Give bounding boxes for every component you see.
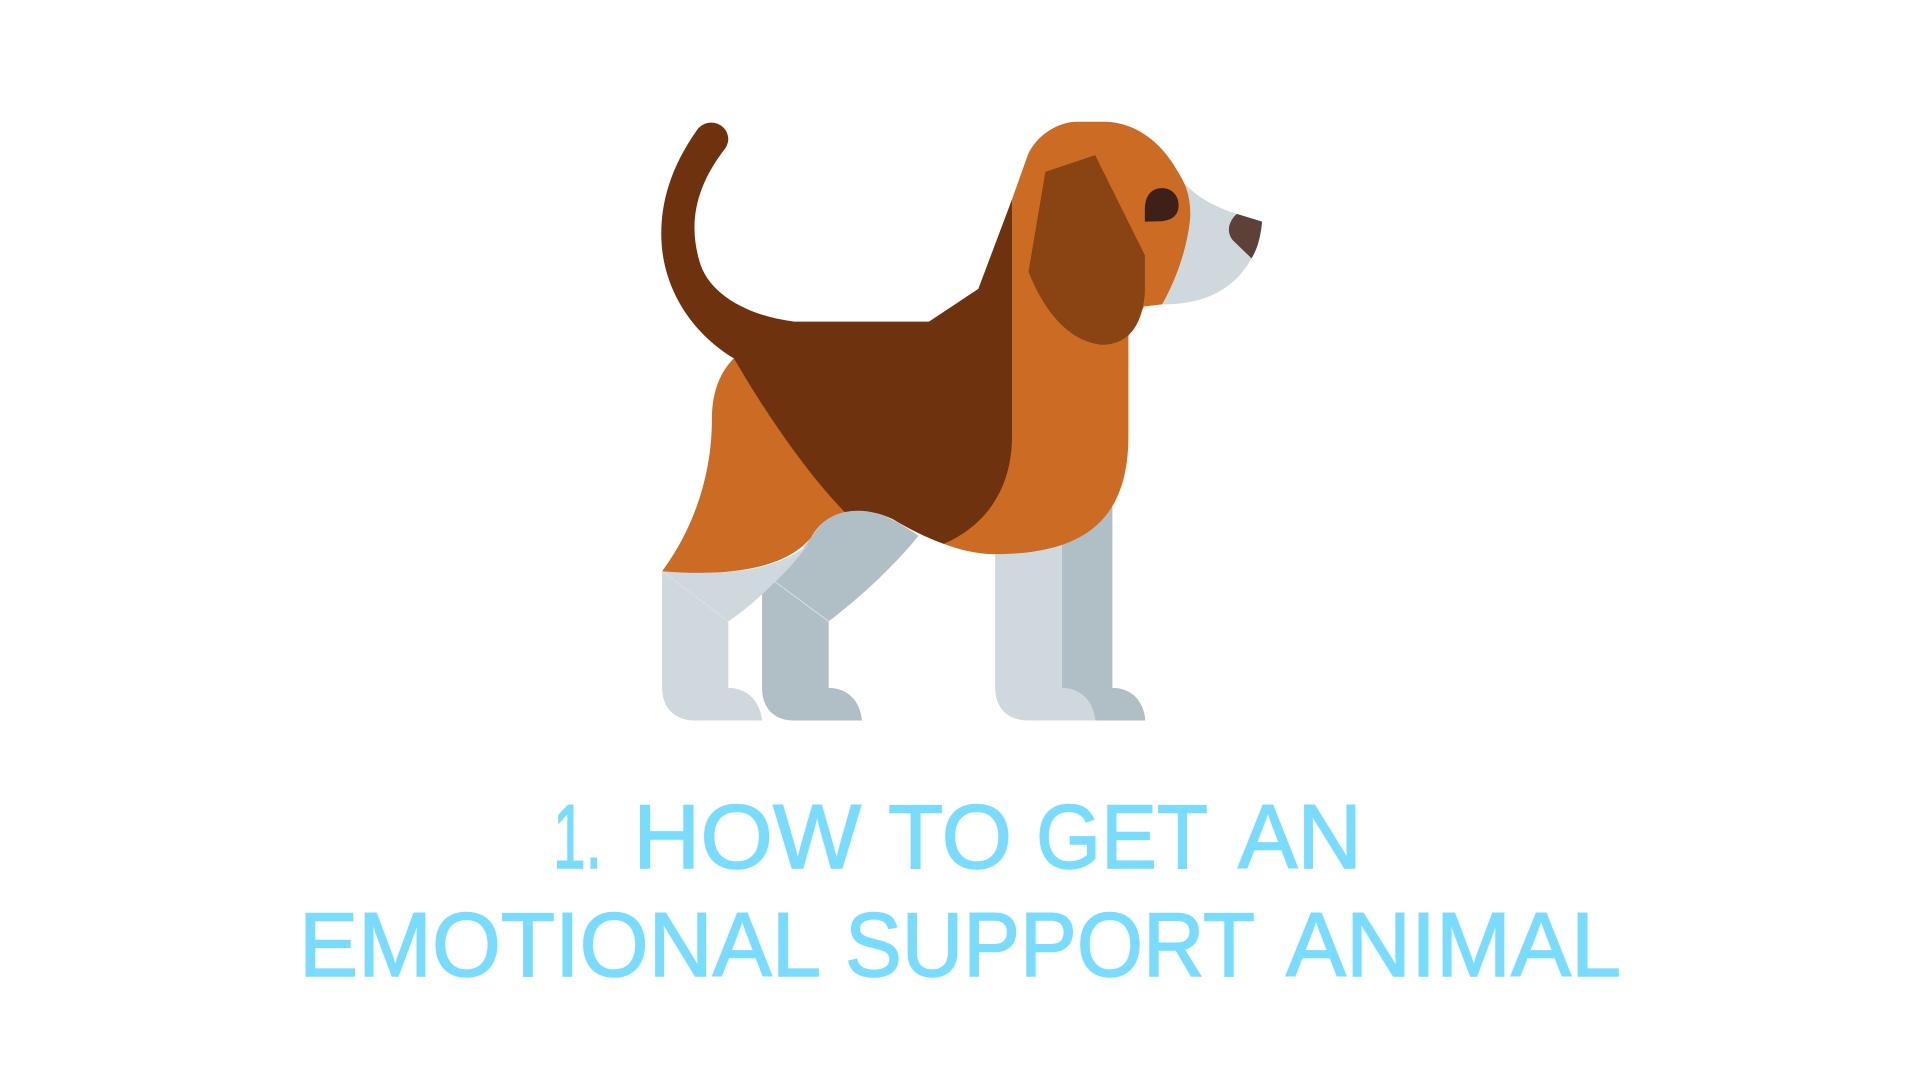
title line 2: EMOTIONAL [299, 895, 821, 996]
title line 1: 1. [553, 787, 602, 888]
ear [1028, 155, 1145, 345]
title [299, 787, 1621, 996]
title line 1: GET [1036, 787, 1208, 888]
near hind leg [662, 571, 762, 720]
near front leg [995, 544, 1096, 720]
far front leg [1062, 501, 1145, 720]
chest and head [944, 122, 1190, 554]
title line 1: HOW [633, 787, 861, 888]
rump [662, 358, 859, 573]
title line 2: ANIMAL [1286, 895, 1621, 996]
far hind leg [762, 582, 862, 720]
saddle and tail [661, 123, 1012, 544]
icon: beagle dog [661, 122, 1262, 720]
title line 1: TO [888, 787, 1012, 888]
title line 1: AN [1238, 787, 1362, 888]
nose [1229, 214, 1262, 258]
near hind thigh [662, 544, 809, 621]
far hind thigh [775, 510, 918, 621]
title line 2: SUPPORT [845, 895, 1255, 996]
eye [1145, 188, 1179, 222]
snout [1162, 183, 1262, 304]
